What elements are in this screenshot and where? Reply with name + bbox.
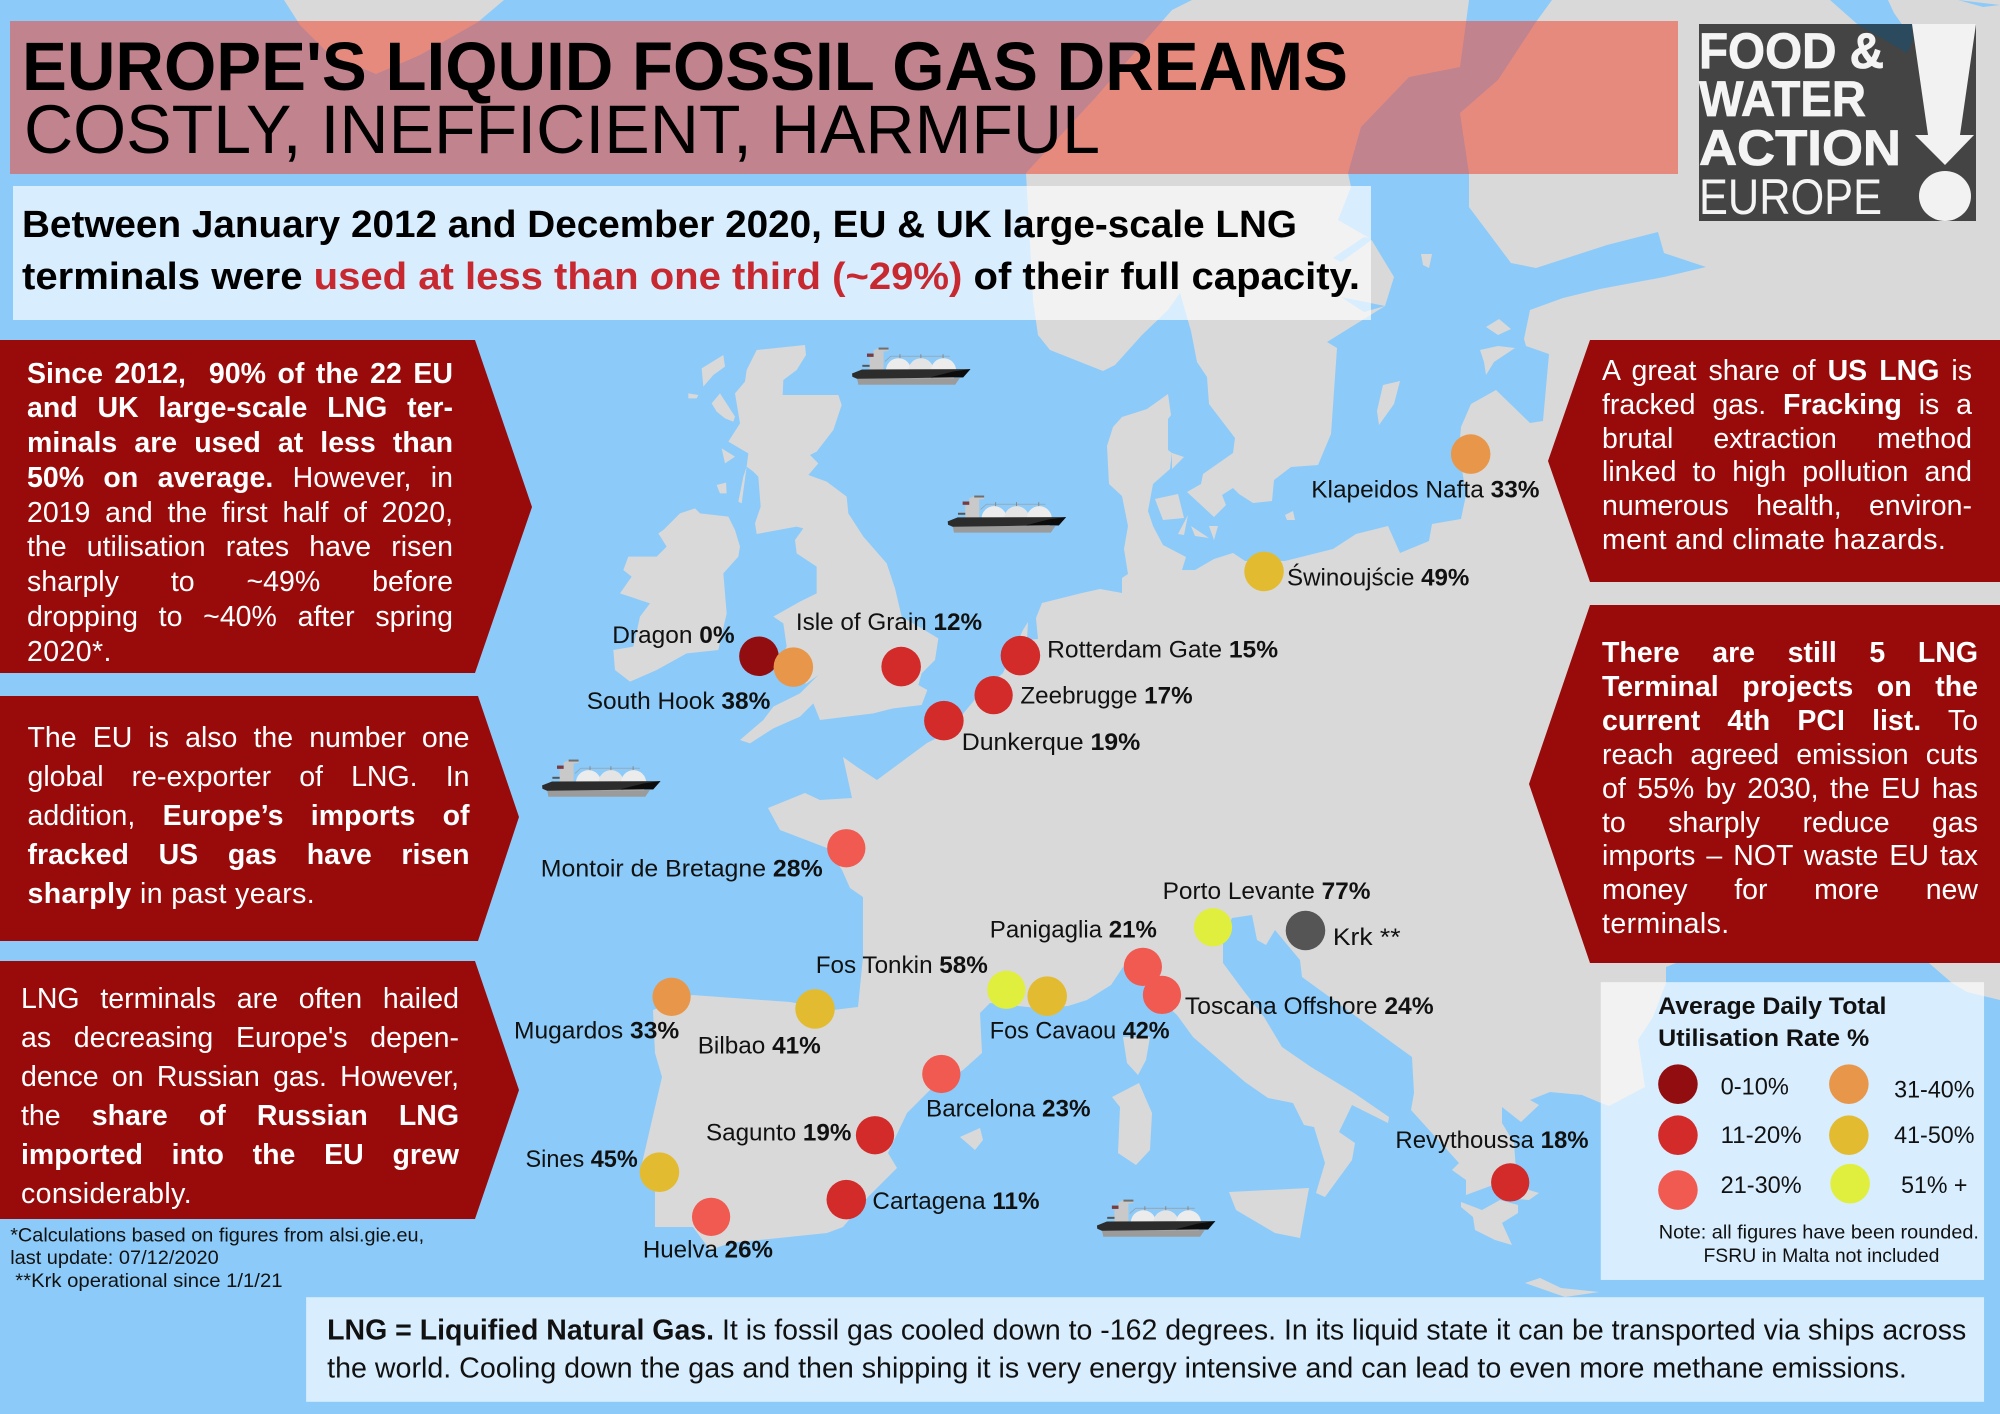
panel text: global re-exporter of LNG. In [28,761,470,793]
terminal labels: Panigaglia 21% [990,916,1157,942]
panel text: The EU is also the number one [28,722,470,754]
terminal labels: Dunkerque 19% [962,729,1140,755]
terminal labels: Revythoussa 18% [1395,1127,1589,1153]
land: Scandinavia [1026,0,1469,517]
panel text: of 55% by 2030, the EU has [1602,773,1978,805]
legend title [1658,993,1886,1051]
panel text: to sharply reduce gas [1602,807,1978,839]
panel text: ment and climate hazards. [1602,524,1946,556]
panel text: dropping to ~40% after spring [27,601,453,633]
logo: Food & Water Action Europe: FOOD & [1699,23,1884,79]
terminal labels: Bilbao 41% [698,1033,821,1059]
legend ranges: 31-40% [1894,1077,1975,1103]
panel text [1602,641,1978,934]
terminal labels: Isle of Grain 12% [796,609,982,635]
logo: Food & Water Action Europe: WATER [1699,71,1866,127]
panel text: fracked US gas have risen [28,839,470,871]
terminal labels: Cartagena 11% [872,1188,1040,1214]
panel text: dence on Russian gas. However, [21,1061,459,1093]
panel text: current 4th PCI list. To [1602,705,1978,737]
terminal labels: Sagunto 19% [706,1119,851,1145]
water: Swedish coast inlets [1333,237,1385,312]
legend note: FSRU in Malta not included [1703,1245,1939,1267]
panel text: Terminal projects on the [1602,671,1978,703]
panel text: the utilisation rates have risen [27,531,453,563]
land: Mediterranean and Baltic islands [960,254,1599,1297]
panel text: There are still 5 LNG [1602,637,1978,669]
terminal labels: Huelva 26% [643,1237,773,1263]
panel text: the share of Russian LNG [21,1100,459,1132]
panel text: imported into the EU grew [21,1139,459,1171]
ship North Sea [948,496,1066,533]
terminal labels [514,476,1589,1263]
ship north [852,348,970,385]
panel text: addition, Europe’s imports of [28,800,470,832]
footnotes: *Calculations based on figures from alsi.gie.eu, [10,1225,424,1247]
panel text: numerous health, environ- [1602,490,1972,522]
panel: number one re-exporter [0,696,519,941]
panel text: imports – NOT waste EU tax [1602,840,1978,872]
map labels and markers [10,348,1984,1402]
panel text [21,987,460,1209]
water: northern lakes [1830,0,2000,53]
panel text [27,362,452,662]
terminal labels: Fos Tonkin 58% [816,952,988,978]
terminal labels: Fos Cavaou 42% [990,1017,1170,1043]
terminal labels: Zeebrugge 17% [1020,682,1193,708]
lead statement box: terminals were used at less than one third (~29%) of their full capacity. [22,256,1360,298]
panel text: 50% on average. However, in [27,462,453,494]
panel text: as decreasing Europe's depen- [21,1022,459,1054]
panel text: linked to high pollution and [1602,456,1972,488]
title line one: EUROPE'S LIQUID FOSSIL GAS DREAMS [22,28,1348,105]
terminal labels: Świnoujście 49% [1287,563,1469,590]
panel text: and UK large-scale LNG ter- [27,392,453,424]
legend ranges: 11-20% [1721,1122,1802,1148]
panel text: considerably. [21,1178,192,1210]
logo: Food & Water Action Europe: EUROPE [1699,169,1882,225]
land: Ireland [613,508,740,682]
legend note [1659,1222,1979,1267]
LNG definition box: LNG = Liquified Natural Gas. It is fossil gas cooled down to -162 degrees. In its liquid state it can be transported via ships across [327,1314,1966,1346]
legend [1601,982,1984,1280]
land: Iceland [284,0,504,74]
panel text: brutal extraction method [1602,423,1972,455]
terminal labels: Mugardos 33% [514,1017,679,1043]
LNG definition box: the world. Cooling down the gas and then shipping it is very energy intensive and can lead to even more methane emissions. [327,1353,1907,1385]
terminal labels: South Hook 38% [587,688,770,714]
footnotes: **Krk operational since 1/1/21 [15,1270,283,1292]
terminal labels: Barcelona 23% [926,1096,1091,1122]
panel: PCI list projects [1529,605,2000,963]
legend title: Utilisation Rate % [1658,1025,1869,1051]
panel text: sharply in past years. [28,878,315,910]
panel text: minals are used at less than [27,427,453,459]
terminal labels: Sines 45% [526,1146,638,1172]
logo: Food & Water Action Europe [1699,23,1976,225]
legend ranges: 0-10% [1721,1073,1789,1099]
lead statement box: Between January 2012 and December 2020, EU & UK large-scale LNG [22,204,1297,246]
panel text: Since 2012, 90% of the 22 EU [27,358,453,390]
footnotes [10,1225,424,1292]
terminal labels: Toscana Offshore 24% [1185,993,1434,1019]
panel text: 2020*. [27,636,112,668]
panel text: money for more new [1602,874,1978,906]
land: continental Europe [640,0,2000,1250]
panel text: LNG terminals are often hailed [21,983,459,1015]
terminal labels: Dragon 0% [612,622,735,648]
panel text: 2019 and the first half of 2020, [27,497,453,529]
legend ranges: 51% + [1901,1172,1967,1198]
terminal labels: Krk ** [1333,924,1401,950]
lead statement box [13,186,1371,320]
terminal labels: Porto Levante 77% [1163,878,1371,904]
panel text: terminals. [1602,908,1730,940]
legend swatches [1658,1064,1870,1210]
LNG definition box [306,1297,1984,1402]
terminal labels: Montoir de Bretagne 28% [541,855,823,881]
footnotes: last update: 07/12/2020 [10,1247,219,1269]
logo: Food & Water Action Europe: ACTION [1699,120,1901,176]
panel: Russian LNG [0,961,519,1219]
legend ranges: 21-30% [1721,1172,1802,1198]
ship Atlantic [542,760,660,797]
legend title: Average Daily Total [1658,993,1886,1019]
panel text: fracked gas. Fracking is a [1602,389,1972,421]
legend ranges: 41-50% [1894,1122,1975,1148]
panel text: A great share of US LNG is [1602,355,1972,387]
land: Great Britain [728,345,938,743]
land: Scottish islands [688,355,735,493]
panel text: sharply to ~49% before [27,566,453,598]
panel: terminals under 50% [0,340,532,673]
panel: US LNG fracking [1548,340,2000,582]
legend note: Note: all figures have been rounded. [1659,1222,1979,1244]
logo arrow [1912,24,1976,165]
title band [10,21,1678,174]
panel text [1602,359,1972,550]
panel text [28,726,470,909]
terminal markers [640,434,1529,1236]
ship Mediterranean [1097,1200,1215,1237]
panel text: reach agreed emission cuts [1602,739,1978,771]
legend ranges [1721,1073,1975,1198]
terminal labels: Rotterdam Gate 15% [1047,637,1278,663]
terminal labels: Klapeidos Nafta 33% [1311,476,1540,502]
title line two: COSTLY, INEFFICIENT, HARMFUL [24,91,1100,168]
